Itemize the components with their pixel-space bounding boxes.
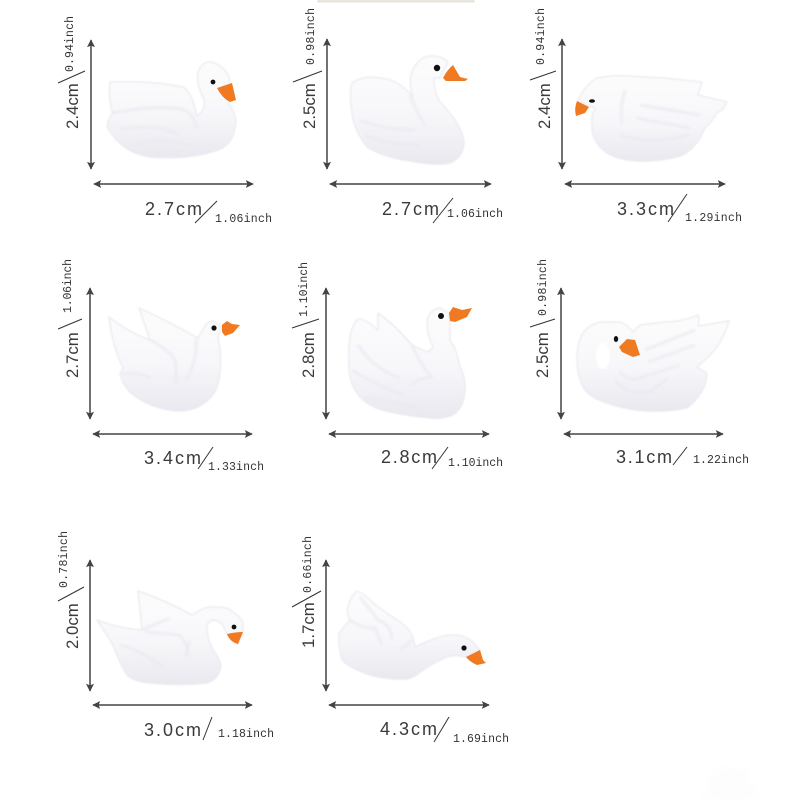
height label 4: 2.7cm (63, 332, 82, 378)
height label 1: 0.94inch (64, 16, 77, 72)
width label 5: 2.8cm (381, 447, 437, 467)
swan unit 1 (58, 16, 272, 226)
height label 2 (293, 8, 322, 129)
width label 3: 1.29inch (685, 212, 742, 225)
swan illustration 5 (349, 307, 472, 419)
width label 2: 2.7cm (382, 199, 439, 219)
swan illustration 3 (575, 76, 727, 161)
swan illustration 8 (339, 591, 486, 679)
width label 5: 1.10inch (448, 457, 503, 470)
top edge bar (318, 0, 474, 2)
width label 6: 3.1cm (616, 447, 672, 467)
width arrow 6 (564, 433, 723, 435)
width label 4: 1.33inch (208, 461, 264, 474)
width label 4: 3.4cm (144, 448, 201, 468)
width label 2: 1.06inch (447, 208, 503, 221)
height label 7: 0.78inch (58, 531, 71, 588)
width label 8 (380, 717, 509, 746)
height label 3: 0.94inch (535, 8, 548, 65)
height arrow 6 (560, 288, 562, 419)
swan unit 4 (58, 259, 264, 474)
swan unit 5 (292, 262, 503, 470)
height label 5: 1.10inch (298, 262, 311, 317)
height label 6 (530, 259, 555, 378)
width label 6: 1.22inch (693, 454, 749, 467)
swan illustration 2 (350, 56, 468, 164)
faint ghost swan (662, 768, 760, 800)
width arrow 5 (329, 433, 489, 435)
height arrow 3 (561, 39, 563, 169)
height label 3 (530, 8, 556, 129)
height label 2: 2.5cm (300, 83, 319, 129)
swan unit 6 (530, 259, 749, 467)
height arrow 4 (89, 288, 91, 419)
height label 4 (58, 259, 82, 378)
height label 3: 2.4cm (535, 83, 554, 129)
width label 6 (616, 447, 749, 467)
width label 1: 2.7cm (145, 199, 202, 219)
width arrow 7 (93, 704, 252, 706)
width label 3: 3.3cm (617, 199, 674, 219)
height label 5: 2.8cm (299, 332, 318, 378)
height label 6: 2.5cm (533, 332, 552, 378)
height label 8: 1.7cm (299, 602, 318, 648)
width label 7 (144, 717, 274, 741)
height label 7 (58, 531, 84, 649)
width label 7: 3.0cm (144, 720, 201, 740)
width label 1 (145, 199, 272, 226)
height label 2: 0.98inch (305, 8, 318, 65)
width label 2 (382, 198, 503, 223)
height label 5 (292, 262, 319, 378)
width arrow 2 (330, 183, 491, 185)
width label 8: 1.69inch (453, 733, 509, 746)
height arrow 5 (325, 288, 327, 419)
width arrow 1 (94, 183, 253, 185)
swan illustration 6 (577, 315, 729, 411)
height arrow 8 (325, 560, 327, 691)
width label 5 (381, 447, 503, 470)
height label 8: 0.66inch (302, 536, 315, 593)
width label 1: 1.06inch (215, 213, 272, 226)
swan illustration 7 (97, 591, 243, 684)
swan illustration 1 (107, 62, 236, 158)
height label 1 (58, 16, 85, 129)
width label 7: 1.18inch (218, 728, 274, 741)
height label 1: 2.4cm (63, 83, 82, 129)
width arrow 4 (93, 433, 252, 435)
height arrow 1 (90, 40, 92, 169)
height arrow 7 (89, 560, 91, 691)
width arrow 8 (329, 704, 489, 706)
width label 8: 4.3cm (380, 719, 437, 739)
swan unit 8 (292, 536, 509, 746)
swan illustration 4 (109, 308, 240, 411)
swan unit 2 (293, 8, 503, 223)
width label 3 (617, 194, 742, 225)
height label 4: 1.06inch (62, 259, 75, 313)
height label 6: 0.98inch (537, 259, 550, 316)
height label 7: 2.0cm (63, 603, 82, 649)
swan unit 3 (530, 8, 742, 225)
height label 8 (292, 536, 321, 648)
width arrow 3 (565, 183, 725, 185)
height arrow 2 (326, 39, 328, 169)
width label 4 (144, 447, 264, 474)
swan unit 7 (58, 531, 274, 741)
